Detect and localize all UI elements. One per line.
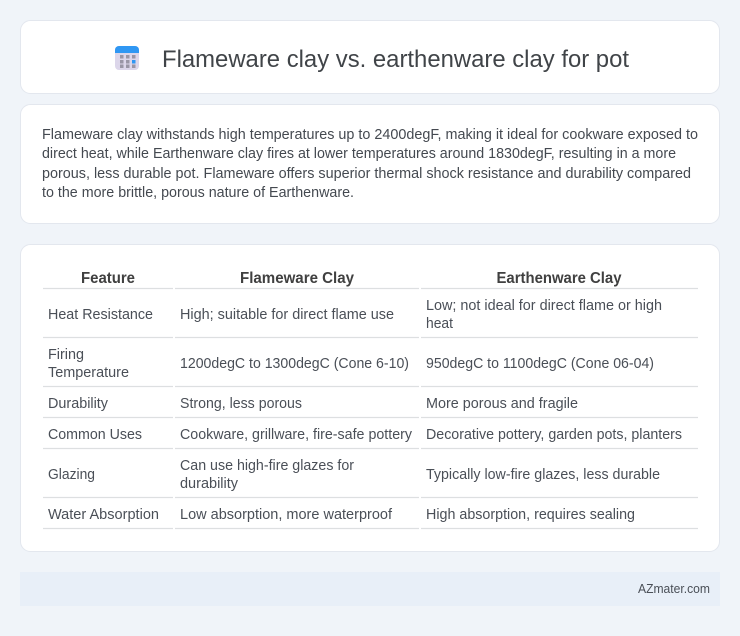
table header — [81, 270, 622, 287]
row: durability: Durability — [48, 396, 109, 412]
row: water absorption: Low absorption, more waterproof — [180, 507, 393, 523]
title: Flameware clay vs. earthenware clay for pot — [162, 46, 629, 73]
summary text — [42, 127, 698, 201]
row: glazing: Can use high-fire glazes for — [180, 458, 354, 474]
row: glazing: Typically low-fire glazes, less durable — [426, 467, 660, 483]
row: common uses: Cookware, grillware, fire-safe pottery — [180, 427, 413, 443]
row: water absorption: Water Absorption — [48, 507, 159, 523]
row: glazing — [48, 458, 660, 492]
summary text: direct heat, while Earthenware clay fires at lower temperatures around 1830degF, resulting in a more — [42, 146, 676, 162]
table header: Feature — [81, 270, 135, 287]
summary text: Flameware clay withstands high temperatures up to 2400degF, making it ideal for cookware exposed to — [42, 127, 698, 143]
row: glazing: Glazing — [48, 467, 95, 483]
row: heat resistance: Low; not ideal for direct flame or high — [426, 298, 662, 314]
row: water absorption: High absorption, requires sealing — [426, 507, 635, 523]
row: firing temperature: 1200degC to 1300degC (Cone 6-10) — [180, 356, 409, 372]
table header: Flameware Clay — [240, 270, 354, 287]
summary text: porous, less durable pot. Flameware offers superior thermal shock resistance and durability compared — [42, 166, 691, 182]
table grid lines — [43, 288, 698, 528]
row: firing temperature: 950degC to 1100degC (Cone 06-04) — [426, 356, 654, 372]
row: durability — [48, 396, 578, 412]
row: heat resistance — [48, 298, 662, 332]
row: firing temperature — [48, 347, 654, 381]
row: heat resistance: High; suitable for direct flame use — [180, 307, 394, 323]
row: heat resistance: Heat Resistance — [48, 307, 153, 323]
row: heat resistance: heat — [426, 316, 453, 332]
row: durability: Strong, less porous — [180, 396, 302, 412]
row: firing temperature: Firing — [48, 347, 84, 363]
table header: Earthenware Clay — [496, 270, 622, 287]
summary text: to the more brittle, porous nature of Earthenware. — [42, 185, 354, 201]
row: common uses: Decorative pottery, garden pots, planters — [426, 427, 682, 443]
row: glazing: durability — [180, 476, 239, 492]
icon: calendar — [115, 46, 139, 70]
comparison table card — [20, 244, 720, 552]
row: common uses — [48, 427, 682, 443]
title card — [20, 20, 720, 94]
row: common uses: Common Uses — [48, 427, 142, 443]
footer bar — [20, 572, 720, 606]
row: durability: More porous and fragile — [426, 396, 578, 412]
footer credit: AZmater.com — [638, 581, 710, 596]
row: water absorption — [48, 507, 635, 523]
summary card — [20, 104, 720, 224]
row: firing temperature: Temperature — [48, 365, 129, 381]
